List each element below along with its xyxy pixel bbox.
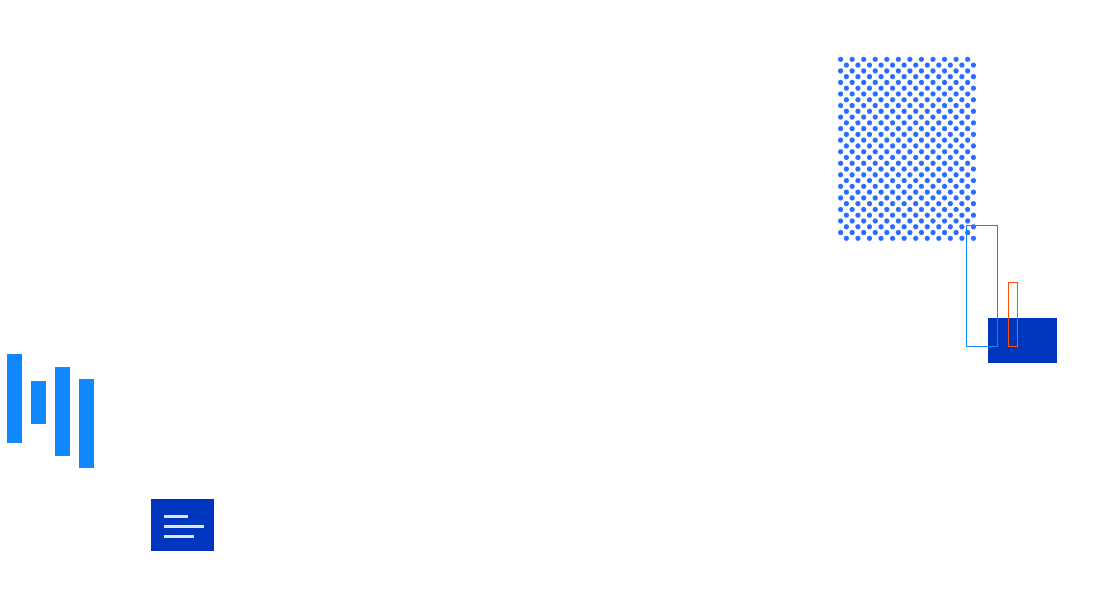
- blue outlined rectangle: [966, 226, 998, 346]
- icon: text lines on blue square: [151, 499, 214, 551]
- solid dark blue rectangle: [988, 318, 1057, 363]
- orange outlined rectangle: [1008, 282, 1018, 346]
- dot grid pattern: [841, 59, 974, 238]
- vertical bars graphic: [7, 354, 94, 468]
